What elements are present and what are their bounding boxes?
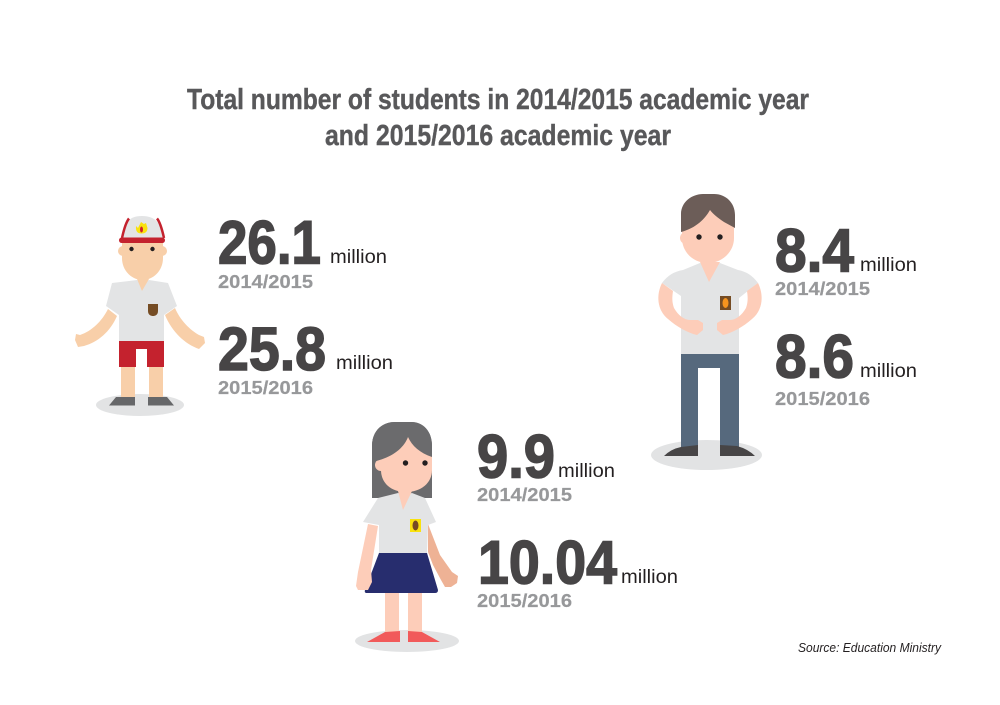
stats: senior high school: 2014/2015 — [775, 279, 870, 299]
badge — [410, 519, 421, 532]
hair — [681, 194, 735, 232]
figure: elementary school boy — [75, 216, 205, 416]
shirt — [106, 280, 177, 341]
shadow — [96, 394, 184, 416]
right arm and hand — [717, 283, 762, 335]
stats: senior high school — [775, 216, 917, 409]
stats: senior high school: 8.4 — [775, 216, 854, 284]
figure: junior high school girl — [355, 422, 459, 652]
title: and 2015/2016 academic year — [325, 120, 671, 152]
source note: Source: Education Ministry — [798, 641, 942, 655]
trousers — [681, 354, 739, 448]
right arm — [165, 308, 205, 349]
legs — [121, 365, 163, 398]
stats: elementary school: million — [336, 353, 393, 374]
badge — [148, 304, 158, 316]
shirt — [363, 493, 436, 553]
stats: elementary school: 25.8 — [218, 315, 326, 383]
title: Total number of students in 2014/2015 academic year — [187, 84, 809, 116]
stats: junior high school: 2015/2016 — [477, 591, 572, 611]
right arm — [428, 524, 458, 587]
stats: elementary school: million — [330, 247, 387, 268]
ears — [118, 246, 128, 256]
stats: elementary school: 2015/2016 — [218, 378, 313, 398]
badge — [720, 296, 731, 310]
shoes — [367, 631, 440, 642]
ear — [680, 232, 692, 244]
hat emblem — [136, 222, 148, 234]
stats: senior high school: million — [860, 255, 917, 276]
stats: elementary school: 2014/2015 — [218, 272, 313, 292]
shadow — [651, 440, 762, 470]
stats: senior high school: 8.6 — [775, 322, 854, 390]
stats: junior high school — [477, 422, 678, 611]
left arm and hand — [356, 524, 378, 590]
stats: junior high school: 2014/2015 — [477, 485, 572, 505]
neck opening — [137, 279, 149, 291]
eyes — [129, 247, 134, 251]
figure: senior high school boy — [651, 194, 762, 470]
shoes — [664, 445, 755, 456]
head — [381, 434, 432, 492]
legs — [385, 590, 422, 632]
skirt — [365, 553, 438, 593]
shirt — [662, 263, 758, 354]
title — [187, 84, 809, 152]
hat — [122, 216, 164, 238]
stats: junior high school: 10.04 — [478, 528, 617, 596]
hair back — [372, 422, 432, 498]
left arm — [75, 309, 117, 347]
eyes — [696, 234, 702, 240]
stats: senior high school: million — [860, 361, 917, 382]
stats: junior high school: 9.9 — [477, 422, 555, 490]
stats: elementary school — [218, 208, 393, 398]
stats: elementary school: 26.1 — [218, 208, 321, 276]
stats: junior high school: million — [558, 461, 615, 482]
neck opening — [398, 491, 412, 510]
eyes — [403, 460, 408, 466]
head — [122, 238, 163, 280]
head — [682, 206, 734, 263]
stats: junior high school: million — [621, 567, 678, 588]
hair fringe — [372, 422, 432, 462]
left arm and hand — [658, 283, 703, 335]
shadow — [355, 630, 459, 652]
shorts — [119, 341, 164, 367]
ear — [375, 459, 387, 471]
stats: senior high school: 2015/2016 — [775, 389, 870, 409]
shoes — [109, 397, 174, 406]
neck opening — [700, 262, 720, 282]
